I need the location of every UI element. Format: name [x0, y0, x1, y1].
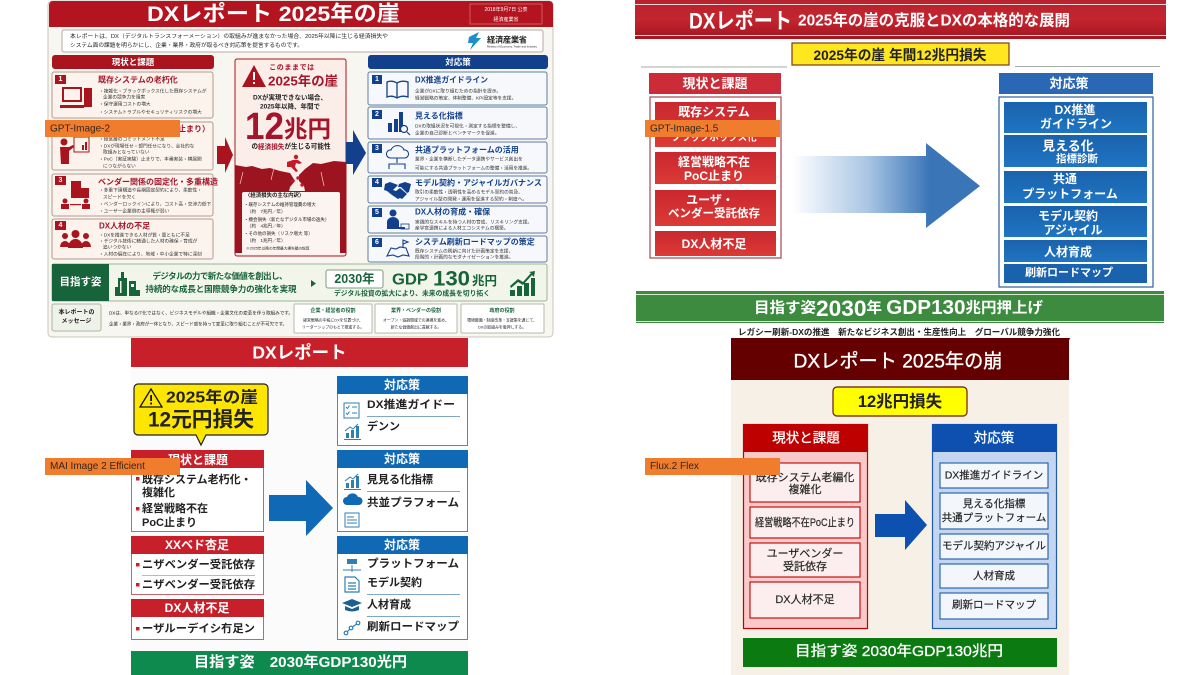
- breakdown of losses: ・その他の損失（リスク増大 等）: [244, 230, 313, 237]
- card 4: DX talent shortage: ・デジタル技術に精通した人材の確保・育成が: [99, 238, 198, 244]
- icon: cloud: [343, 493, 363, 505]
- header banner: DXレポート: [689, 8, 792, 34]
- year box: 2030年: [334, 271, 375, 286]
- box: countermeasures C: モデル契約: [367, 575, 422, 589]
- item: DX推進ガイドライン: [945, 468, 1043, 482]
- icon: METI logo: [468, 32, 537, 50]
- label: GPT-Image-2: [45, 120, 180, 137]
- label: GPT-Image-1.5: GPT-Image-1.5: [650, 124, 719, 134]
- card 3: vendor lock-in: ベンダー関係の固定化・多重構造: [98, 176, 218, 186]
- card 2: no management strategy: 取組みとなっていない: [103, 148, 150, 156]
- item: [940, 564, 1048, 588]
- item: [750, 507, 860, 538]
- breakdown of losses: （約 4兆円／年）: [247, 222, 286, 230]
- card: visibility metrics: 2: [375, 111, 379, 118]
- box: vendor: ニザベンダー受託依存: [142, 557, 255, 571]
- item: talent: [655, 231, 776, 256]
- band: goal: [636, 291, 1164, 323]
- card 2: no management strategy: 経営戦略の不在（PoC止まり）: [98, 124, 210, 134]
- card 3: vendor lock-in: 3: [59, 177, 63, 184]
- column: countermeasures: 対応策: [1049, 76, 1089, 91]
- card: roadmap: [368, 236, 547, 262]
- card 1: legacy systems: 既存システムの老朽化: [98, 74, 178, 84]
- item: talent: DX人材不足: [682, 236, 746, 251]
- callout: annual loss: [792, 43, 1009, 65]
- breakdown of losses: ・既存システムの維持管理費の増大: [244, 201, 316, 208]
- intro text block: [62, 30, 543, 52]
- item: visibility: 指標診断: [1056, 152, 1098, 165]
- card: visibility metrics: 見える化指標: [415, 110, 463, 120]
- box: countermeasures B: 見見る化指標: [367, 472, 433, 486]
- card 3: vendor lock-in: スピードを欠く: [103, 194, 136, 200]
- date box: [470, 4, 542, 24]
- card 3: vendor lock-in: [52, 174, 218, 216]
- card 3: vendor lock-in: ・多重下請構造や長期固定契約により、柔軟性・: [99, 186, 202, 194]
- band: goal: 持続的な成長と国際競争力の強化を実現: [146, 284, 297, 294]
- box: vendor: ニザベンダー受託依存: [142, 577, 255, 591]
- item: モデル契約アジャイル: [942, 539, 1046, 552]
- band: goal: デジタルの力で新たな価値を創出し、: [152, 271, 288, 281]
- header banner: 2025年の崖の克服とDXの本格的な展開: [798, 10, 1070, 30]
- item: platform: 共通: [1053, 171, 1077, 186]
- icon: graduation cap: [342, 599, 362, 612]
- item: 人材育成: [973, 569, 1015, 582]
- icon: computer: [60, 87, 92, 108]
- panel: Flux.2 Flex infographic: [731, 338, 1069, 675]
- icon: cloud network: [386, 146, 409, 169]
- item: strategy: 経営戦略不在: [678, 154, 750, 169]
- item: ユーザベンダー: [767, 546, 843, 560]
- label: MAI Image 2 Efficient: [45, 458, 180, 475]
- role: government: 政府の役割: [489, 307, 515, 314]
- card 1: legacy systems: ・複雑化・ブラックボックス化した既存システムが: [99, 88, 207, 94]
- box: current state: PoC止まり: [142, 515, 197, 529]
- band: goal: 目指す姿 2030年GDP130兆円: [795, 643, 1003, 660]
- box: countermeasures B: 共並プラフォーム: [367, 495, 459, 509]
- item: guideline: DX推進: [1055, 102, 1095, 117]
- icon: bars and magnifier: [388, 112, 410, 135]
- card: talent development: 実践的なスキルを持つ人材の育成、リスキリング支援。: [415, 218, 532, 226]
- box: vendor: XXベド杏足: [165, 537, 229, 552]
- card: model contract: 4: [375, 179, 379, 186]
- date box: 経済産業省: [493, 16, 519, 23]
- message label: 本レポートの: [58, 308, 95, 316]
- panel: 2025 cliff callout: DXが実現できない場合、: [253, 92, 327, 102]
- item: legacy: 既存システム: [678, 104, 750, 119]
- item: strategy: PoC止まり: [684, 168, 744, 183]
- item: contract: アジャイル: [1044, 223, 1102, 237]
- icon: METI logo: Ministry of Economy, Trade and Industry: [487, 44, 537, 48]
- box: current state: 複雑化: [142, 485, 175, 499]
- card: common platform: 共通プラットフォームの活用: [415, 144, 519, 154]
- card: guideline: 1: [375, 76, 379, 83]
- message label: [52, 304, 101, 331]
- card 1: legacy systems: 1: [59, 76, 63, 83]
- icon: buildings and people: [61, 181, 90, 209]
- item: vendor: [655, 190, 776, 226]
- card: guideline: 経営戦略の策定、体制整備、KPI設定等を支援。: [415, 94, 516, 102]
- year box: [326, 270, 383, 288]
- card: roadmap: システム刷新ロードマップの策定: [415, 236, 535, 246]
- item: vendor: ユーザ・: [686, 193, 734, 207]
- box: countermeasures C: 対応策: [384, 537, 420, 552]
- arrow: [875, 500, 927, 550]
- callout: loss: 12兆円損失: [858, 392, 943, 411]
- card: roadmap: 段階的・計画的なモダナイゼーションを推進。: [415, 254, 513, 260]
- role: government: 環境整備・制度改革・支援策を通じて、: [467, 318, 537, 322]
- header banner: DXレポート 2025年の崩: [794, 350, 1002, 372]
- card 3: vendor lock-in: ・ベンダーロックインにより、コスト高・交渉力低下: [99, 200, 212, 208]
- intro text block: 本レポートは、DX（デジタルトランスフォーメーション）の取組みが進まなかった場合、2025年以降に生じる経済損失や: [70, 32, 388, 40]
- item: 経営戦略不在PoC止まり: [755, 515, 855, 529]
- card: talent development: [368, 206, 547, 233]
- message text: DXは、単なるIT化ではなく、ビジネスモデルや組織・企業文化の変革を伴う取組みです。: [109, 310, 293, 316]
- card: model contract: モデル契約・アジャイルガバナンス: [415, 178, 542, 188]
- item: 見える化指標: [963, 497, 1026, 510]
- box: current state: 経営戦略不在: [142, 501, 208, 515]
- card: visibility metrics: [368, 107, 547, 139]
- callout: annual loss: 2025年の崖 年間12兆円損失: [814, 47, 986, 63]
- big figure: 12 trillion yen: 兆円: [284, 116, 331, 142]
- header banner: [731, 338, 1069, 380]
- box: vendor: [131, 536, 264, 594]
- item: [940, 534, 1048, 559]
- item: talent: [1004, 240, 1147, 262]
- breakdown of losses: ・機会損失（新たなデジタル市場の逸失）: [244, 216, 329, 223]
- item: platform: プラットフォーム: [1022, 187, 1118, 201]
- item: contract: モデル契約: [1038, 208, 1098, 223]
- box: countermeasures A: デンン: [367, 419, 400, 433]
- card 2: no management strategy: ・経営層のコミットメント不足: [99, 136, 165, 142]
- header banner: DXレポート: [252, 342, 347, 362]
- card 3: vendor lock-in: ・ユーザー企業側の主導権が弱い: [99, 208, 170, 214]
- item: legacy: ブラックボックス化: [671, 132, 757, 144]
- item: vendor: ベンダー受託依存: [668, 206, 760, 220]
- role: industry: オープン・協調領域での連携を進め、: [383, 318, 449, 322]
- icon: cliff and runner: [235, 155, 346, 253]
- role: government: [461, 304, 544, 333]
- box: current state: [131, 450, 264, 532]
- panel: GPT-Image-1.5 infographic: [635, 0, 1166, 340]
- box: current state: 既存システム老朽化・: [142, 472, 252, 486]
- label: MAI Image 2 Efficient: MAI Image 2 Efficient: [50, 461, 145, 472]
- card 4: DX talent shortage: DX人材の不足: [99, 220, 150, 230]
- label: GPT-Image-1.5: [645, 120, 780, 137]
- arrow: gradient: [792, 143, 980, 228]
- band: goal: [131, 651, 468, 675]
- card: roadmap: 6: [375, 239, 379, 246]
- heading: current state: [52, 55, 214, 69]
- role: companies: 経営戦略の中核にDXを位置づけ、: [303, 318, 363, 322]
- box: countermeasures A: 対応策: [384, 377, 420, 392]
- column: countermeasures: 対応策: [974, 430, 1015, 446]
- panel: MAI Image 2 Efficient infographic: [131, 338, 468, 675]
- box: countermeasures C: [337, 536, 468, 640]
- arrow: left to center: [217, 137, 233, 173]
- card: model contract: 取引の柔軟性・透明性を高めるモデル契約の普及、: [415, 188, 523, 196]
- icon: roadmap nodes: [344, 621, 360, 635]
- message row: [52, 304, 544, 333]
- box: talent: [131, 599, 264, 640]
- item: [750, 543, 860, 577]
- panel: GPT-Image-2 infographic: [48, 1, 553, 337]
- icon: network: [343, 559, 361, 572]
- message text: [109, 310, 293, 328]
- column: countermeasures: [932, 424, 1057, 628]
- icon: chart: [344, 424, 361, 440]
- column: current state: [743, 424, 868, 628]
- card 4: DX talent shortage: ・DXを推進できる人材が質・量ともに不足: [99, 232, 190, 238]
- item: guideline: [1004, 102, 1147, 133]
- panel: 2025 cliff callout: の経済損失が生じる可能性: [251, 142, 331, 150]
- icon: book: [387, 81, 408, 98]
- card: common platform: 業界・企業を横断したデータ連携やサービス創出を: [415, 156, 523, 162]
- role: industry: [375, 304, 457, 333]
- item: 複雑化: [788, 482, 822, 496]
- item: talent: 人材育成: [1044, 244, 1092, 259]
- icon: handshake: [384, 182, 411, 199]
- figure: GDP 130 trillion yen: [392, 268, 497, 290]
- header banner: [131, 338, 468, 367]
- icon: person at laptop: [387, 210, 409, 229]
- icon: warning triangle: [242, 65, 266, 87]
- card 2: no management strategy: につながらない: [103, 162, 136, 170]
- breakdown of losses: ※2025年以降の年間最大損失額の試算: [246, 245, 310, 250]
- card: talent development: 産学官連携による人材エコシステムの構築。: [415, 224, 508, 232]
- icon: document: [345, 577, 359, 592]
- item: visibility: 見える化: [1042, 138, 1094, 154]
- card: guideline: 企業がDXに取り組むための指針を提示。: [415, 88, 501, 94]
- role: companies: [294, 304, 372, 333]
- band: goal: 目指す姿2030年 GDP130兆円押上げ: [754, 296, 1043, 320]
- icon: people: [60, 230, 91, 248]
- card: common platform: 3: [375, 145, 379, 152]
- role: companies: 企業・経営者の役割: [310, 307, 356, 314]
- label: Flux.2 Flex: [645, 458, 780, 475]
- item: [940, 593, 1048, 619]
- heading: countermeasures: 対応策: [445, 57, 471, 67]
- big figure: 12 trillion yen: 12: [245, 106, 284, 148]
- icon: city: [115, 272, 140, 296]
- label: GPT-Image-2: GPT-Image-2: [50, 124, 110, 134]
- card: model contract: [368, 176, 547, 203]
- role: industry: 業界・ベンダーの役割: [391, 307, 441, 314]
- panel: 2025 cliff callout: 2025年の崖: [268, 74, 338, 88]
- card 1: legacy systems: ・保守運用コストの増大: [99, 100, 151, 108]
- card: guideline: [368, 72, 547, 105]
- box: countermeasures A: [337, 376, 468, 446]
- item: [750, 463, 860, 502]
- breakdown of losses: （約 1兆円／年）: [247, 237, 286, 244]
- item: DX人材不足: [775, 592, 835, 606]
- card: guideline: DX推進ガイドライン: [415, 74, 488, 84]
- item: legacy: [655, 102, 776, 147]
- band: goal: [52, 264, 547, 301]
- icon: document: [345, 513, 359, 527]
- card: common platform: [368, 142, 547, 173]
- card: visibility metrics: DXの取組状況を可視化・測定する指標を整備し、: [415, 122, 520, 130]
- icon: chart: [344, 474, 361, 490]
- figure: GDP 130 trillion yen: 兆円: [472, 274, 497, 288]
- card 4: DX talent shortage: 追いつかない: [103, 244, 131, 250]
- card: model contract: アジャイル型の開発・運用を促進する契約・制度へ。: [415, 196, 527, 202]
- item: strategy: [655, 152, 776, 184]
- box: countermeasures A: DX推進ガイドー: [367, 397, 455, 411]
- panel: 2025 cliff callout: [235, 59, 346, 256]
- icon: presenter: [60, 137, 89, 164]
- date box: 2018年9月7日 公表: [484, 6, 528, 13]
- box: countermeasures C: 刷新ロードマップ: [367, 619, 459, 633]
- card 2: no management strategy: ・DXが現場任せ・部門任せになり、全社的な: [99, 142, 195, 150]
- card: talent development: 5: [375, 209, 379, 216]
- heading: countermeasures: [368, 55, 548, 69]
- card: common platform: 可能にする共通プラットフォームの整備・活用を推進。: [415, 164, 532, 172]
- item: 刷新ロードマップ: [952, 598, 1036, 611]
- icon: map with flag: [387, 240, 409, 257]
- card 4: DX talent shortage: [52, 219, 213, 259]
- panel: 2025 cliff callout: 2025年以降、年間で: [260, 102, 320, 110]
- icon: rising chart: [510, 271, 535, 296]
- header banner: [49, 1, 553, 27]
- message label: メッセージ: [62, 318, 91, 325]
- subtitle line: レガシー刷新-DXの推進 新たなビジネス創出・生産性向上 グローバル競争力強化: [738, 327, 1060, 337]
- role: government: DXの取組みを後押しする。: [478, 324, 526, 330]
- breakdown of losses: （約 7兆円／年）: [247, 208, 286, 215]
- item: roadmap: [1004, 264, 1147, 283]
- box: countermeasures B: [337, 450, 468, 532]
- box: current state: 現状と課題: [168, 452, 228, 467]
- icon: warning: [140, 389, 162, 407]
- column: current state: 現状と課題: [772, 430, 840, 446]
- item: visibility: [1004, 135, 1147, 167]
- column: current state: [649, 73, 781, 258]
- card: visibility metrics: 企業の自己診断とベンチマークを促進。: [415, 130, 499, 136]
- item: platform: [1004, 171, 1147, 203]
- band: goal: 目指す姿: [60, 275, 102, 288]
- item: roadmap: 刷新ロードマップ: [1025, 265, 1113, 279]
- callout: loss: [833, 387, 967, 416]
- breakdown of losses: 〈経済損失の主な内訳〉: [245, 191, 304, 199]
- item: guideline: ガイドライン: [1040, 116, 1112, 131]
- card 1: legacy systems: [52, 72, 213, 118]
- card 1: legacy systems: ・システムトラブルやセキュリティリスクの増大: [99, 108, 202, 116]
- icon: checklist: [344, 403, 359, 418]
- item: 既存システム老編化: [756, 470, 854, 484]
- header banner: [635, 0, 1166, 39]
- message text: 企業・業界・政府が一体となり、スピード感を持って変革に取り組むことが不可欠です。: [109, 320, 287, 328]
- band: goal: [743, 638, 1057, 667]
- big figure: 12 trillion yen: [245, 106, 331, 148]
- item: [940, 463, 1048, 488]
- box: countermeasures C: 人材育成: [367, 597, 411, 611]
- figure: GDP 130 trillion yen: 130: [433, 268, 470, 290]
- callout: speech bubble: 2025年の崖: [166, 388, 258, 406]
- role: industry: 新たな価値創出に貢献する。: [391, 324, 441, 330]
- column: countermeasures: [999, 73, 1153, 287]
- card 2: no management strategy: ・PoC（実証実験）止まりで、本番実装・横展開: [99, 156, 202, 162]
- arrow: [269, 480, 333, 536]
- band: goal: デジタル投資の拡大により、未来の成長を切り拓く: [334, 288, 490, 298]
- role: companies: リーダーシップのもとで推進する。: [302, 324, 364, 330]
- intro text block: システム面の課題を明らかにし、企業・業界・政府が取るべき対応策を提言するものです。: [70, 41, 303, 49]
- callout: speech bubble: 12元円損失: [148, 408, 254, 432]
- card 4: DX talent shortage: 4: [59, 222, 63, 229]
- item: contract: [1004, 206, 1147, 237]
- card 4: DX talent shortage: ・人材の偏在により、地域・中小企業で特に深刻: [99, 250, 202, 258]
- figure: GDP 130 trillion yen: GDP: [392, 272, 428, 288]
- card 1: legacy systems: 企業の競争力を阻害: [103, 94, 146, 100]
- heading: current state: 現状と課題: [112, 57, 155, 67]
- card: roadmap: 既存システムの刷新に向けた計画策定を支援、: [415, 248, 513, 254]
- item: [750, 582, 860, 618]
- card 2: no management strategy: [52, 122, 213, 170]
- icon: METI logo: 経済産業省: [487, 34, 527, 44]
- breakdown of losses: [242, 191, 340, 254]
- column: current state: 現状と課題: [682, 76, 748, 91]
- item: 受託依存: [783, 559, 827, 573]
- band: goal: 目指す姿 2030年GDP130光円: [194, 653, 407, 671]
- panel: 2025 cliff callout: このままでは: [269, 64, 315, 72]
- box: talent: DX人材不足: [165, 600, 229, 615]
- box: countermeasures C: プラットフォーム: [367, 557, 459, 570]
- card: talent development: DX人材の育成・確保: [415, 206, 490, 216]
- box: countermeasures B: 対応策: [384, 451, 420, 466]
- arrow: center to right: [346, 130, 366, 175]
- callout: speech bubble: [134, 384, 268, 445]
- box: talent: ーザルーデイシ冇足ン: [142, 621, 255, 635]
- item: 共通プラットフォーム: [942, 512, 1046, 524]
- label: Flux.2 Flex: Flux.2 Flex: [650, 461, 699, 472]
- title: DXレポート 2025年の崖: [147, 2, 400, 26]
- item: [940, 493, 1048, 529]
